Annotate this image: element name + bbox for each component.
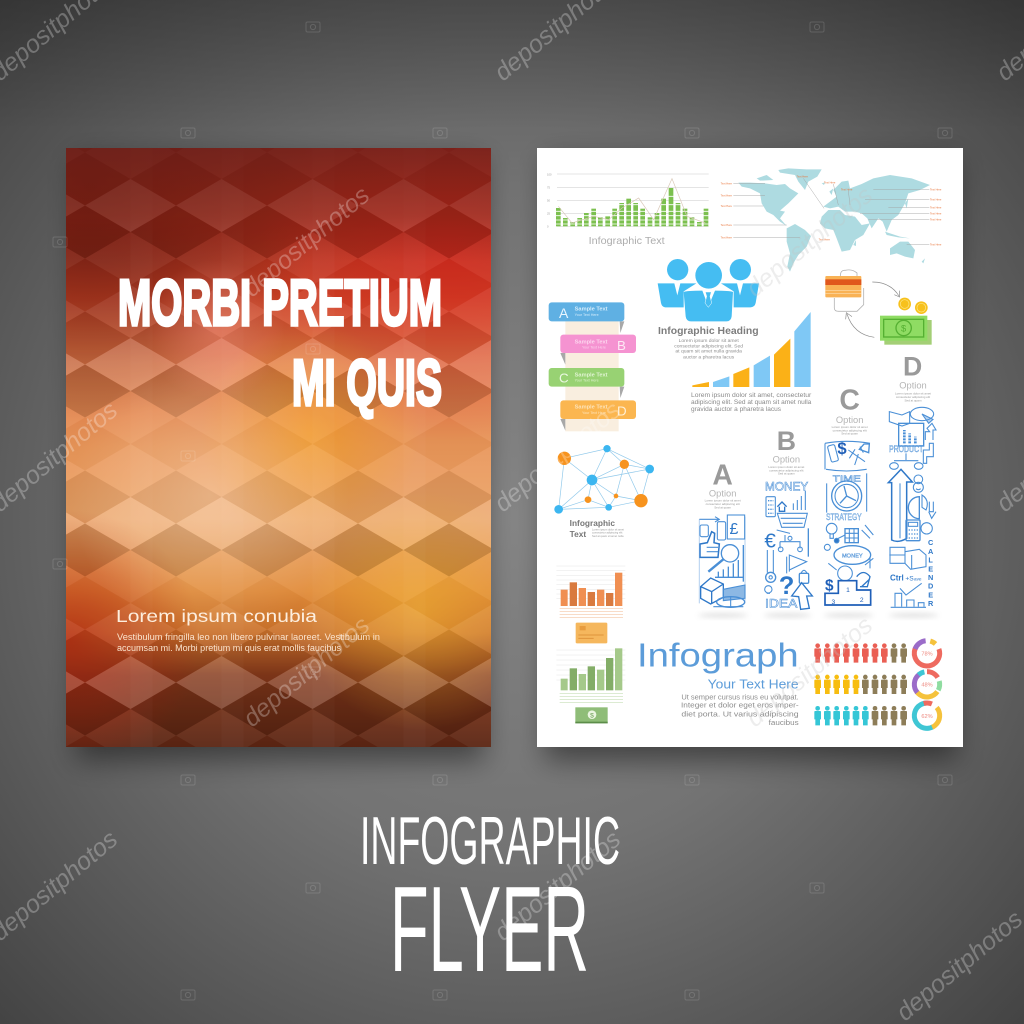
network caption — [570, 518, 624, 539]
world map: Text Here — [930, 217, 942, 221]
ribbon D — [560, 400, 636, 419]
icon: banknote — [575, 707, 608, 723]
pictogram row teal 62% — [814, 706, 907, 725]
watermarks: depositphotos — [238, 611, 375, 733]
doodle column D: +S — [905, 576, 914, 583]
watermarks: depositphotos — [489, 825, 626, 947]
ribbon list — [549, 302, 636, 431]
option B label: Lorem ipsum dolor sit amet — [768, 465, 804, 469]
panel: white infographic flyer — [537, 148, 963, 747]
infograph paragraph: faucibus — [769, 720, 799, 727]
world map: Text Here — [930, 205, 942, 209]
bottom title — [360, 803, 620, 997]
doodle column B: ? — [779, 572, 794, 600]
world map: Text Here — [819, 237, 831, 241]
icon: banknote: $ — [590, 712, 594, 719]
doodle column B: € — [764, 529, 776, 552]
option labels C D: Sed at quam — [905, 398, 922, 402]
doodle column D: A — [928, 547, 934, 556]
infograph paragraph: Ut semper cursus risus eu volutpat. — [681, 694, 799, 701]
watermarks: depositphotos — [238, 181, 375, 303]
watermarks: depositphotos — [489, 396, 626, 518]
cover body text — [117, 632, 380, 654]
heading paragraph — [674, 338, 743, 361]
doodle column D: Ctrl — [890, 574, 904, 583]
option A label: Option — [709, 489, 736, 499]
world map: Text Here — [930, 211, 942, 215]
ribbon C: C — [559, 371, 569, 386]
doodle column C: 2 — [860, 597, 864, 604]
ribbon B: B — [617, 338, 626, 353]
option B label: consectetur adipiscing elit — [769, 468, 804, 472]
world map: Text Here — [797, 175, 809, 179]
line and bar chart: 75 — [547, 186, 550, 190]
doodle column shadows — [698, 614, 939, 617]
heading paragraph: consectetur adipiscing elit. Sed — [674, 343, 743, 349]
chart caption: Infographic Text — [589, 236, 665, 247]
ribbon B: Sample Text — [575, 340, 608, 346]
cover body text: accumsan mi. Morbi pretium mi quis erat mollis faucibus — [117, 643, 341, 654]
option labels C D: Lorem ipsum dolor sit amet — [895, 392, 931, 396]
ribbon B — [560, 335, 636, 353]
donut 62%: 62% — [921, 714, 933, 720]
line and bar chart: 25 — [547, 212, 550, 216]
option labels C D: Lorem ipsum dolor sit amet — [832, 425, 868, 429]
ribbon D: Sample Text — [575, 405, 608, 411]
ribbon C: Your Text Here — [575, 378, 599, 382]
doodle column A: £ — [730, 521, 739, 538]
doodle column D: ave — [914, 577, 922, 582]
cover subtitle: Lorem ipsum conubia — [116, 606, 317, 626]
infograph paragraph: Integer et dolor eget eros imper- — [681, 703, 799, 710]
bottom title: INFOGRAPHIC — [360, 803, 620, 879]
cover title: MORBI PRETIUM — [118, 266, 442, 339]
option A label: consectetur adipiscing elit — [706, 502, 740, 506]
ribbon A: Sample Text — [575, 307, 608, 313]
ribbon A — [549, 302, 624, 321]
world map: Text Here — [930, 197, 942, 201]
doodle column D: L — [928, 556, 933, 565]
network caption: Lorem ipsum dolor sit amet — [592, 528, 624, 532]
growth chart paragraph: Lorem ipsum dolor sit amet, consectetur — [691, 393, 811, 399]
world map: Text Here — [824, 180, 836, 184]
doodle column C: $ — [825, 578, 834, 595]
network caption: Sed at quam sit amet nulla — [592, 534, 624, 538]
doodle column C: TIME — [833, 474, 862, 484]
doodle column B — [764, 480, 812, 611]
donut 78% — [911, 637, 943, 670]
growth chart paragraph — [691, 393, 812, 413]
growth chart paragraph: adipiscing elit. Sed at quam sit amet nulla — [691, 400, 812, 406]
option labels C D: Option — [899, 381, 927, 391]
ribbon C — [549, 368, 624, 387]
heading paragraph: at quam sit amet nulla gravida — [675, 349, 742, 355]
doodle column D: R — [928, 599, 934, 608]
growth chart paragraph: gravida auctor a pharetra lacus — [691, 407, 781, 413]
network caption: Infographic — [570, 518, 615, 528]
option A label: Sed at quam — [714, 505, 732, 509]
panel: red-orange cover flyer — [66, 148, 491, 747]
upper infographic group — [547, 172, 932, 436]
green bar chart — [556, 648, 625, 702]
doodle column A — [699, 515, 745, 607]
option B label: Option — [773, 455, 800, 465]
option A label: A — [712, 459, 733, 491]
orange bar chart — [556, 566, 625, 618]
world map: Text Here — [930, 242, 942, 246]
infograph paragraph: diet porta. Ut varius adipiscing — [681, 712, 799, 719]
doodle column B: IDEA — [765, 597, 798, 611]
doodle column C: 3 — [831, 599, 835, 606]
doodle column C: $ — [837, 439, 847, 458]
option B label: B — [777, 426, 796, 456]
flyer drop shadows — [76, 160, 957, 760]
doodle column D — [888, 407, 936, 608]
donut 62% — [909, 698, 945, 734]
watermarks on white panel: depositphotos — [741, 181, 878, 303]
ribbon D: D — [617, 403, 627, 418]
world map: Text Here — [841, 187, 853, 191]
doodle column D: E — [928, 590, 933, 599]
cover title: MI QUIS — [292, 346, 442, 419]
watermarks on white panel — [741, 181, 878, 733]
doodle column D: E — [928, 564, 933, 573]
option labels C D: D — [903, 351, 922, 381]
option A label — [705, 459, 741, 509]
icon: credit card — [576, 623, 607, 643]
pictogram row yellow 48% — [814, 675, 907, 694]
icon: card and money cycle — [825, 270, 932, 345]
world map: Text Here — [721, 223, 733, 227]
donut 48%: 48% — [921, 683, 933, 689]
world map: Text Here — [721, 194, 733, 198]
doodle column C: STRATEGY — [826, 512, 862, 522]
heading paragraph: auctor a pharetra lacus — [683, 355, 735, 361]
bottom title: FLYER — [390, 861, 589, 997]
option labels C D — [832, 351, 931, 436]
infograph paragraph — [681, 694, 799, 727]
heading paragraph: Lorem ipsum dolor sit amet — [679, 338, 739, 344]
option labels C D: C — [839, 385, 860, 417]
watermarks on white panel: depositphotos — [741, 611, 878, 733]
doodle column D: N — [928, 573, 933, 582]
ribbon C: Sample Text — [575, 372, 608, 378]
icon: business people — [658, 259, 759, 321]
cover body text: Vestibulum fringilla leo non libero pulvinar laoreet. Vestibulum in — [117, 632, 380, 643]
option labels C D: Sed at quam — [841, 432, 859, 436]
doodle column D: PRODUCT — [889, 444, 924, 454]
ribbon A: A — [559, 305, 569, 321]
growth bar chart — [692, 312, 811, 387]
doodle column B: MONEY — [765, 480, 808, 494]
line and bar chart: 50 — [547, 199, 550, 203]
heading: Infographic Heading — [658, 326, 759, 337]
world map: Text Here — [721, 235, 733, 239]
doodle column C — [824, 439, 873, 606]
ribbon B: Your Text Here — [582, 346, 606, 350]
option labels C D: consectetur adipiscing elit — [833, 428, 867, 432]
line and bar chart: 0 — [547, 224, 549, 228]
world map: Text Here — [721, 204, 733, 208]
network caption: consectetur adipiscing elit — [592, 531, 623, 535]
donut 78%: 78% — [921, 652, 933, 658]
world map: Text Here — [721, 181, 733, 185]
option B label — [768, 426, 804, 476]
lower infographic group — [554, 426, 945, 734]
option labels C D: consectetur adipiscing elit — [896, 395, 930, 399]
option B label: Sed at quam — [778, 472, 795, 476]
title: Infograph: Infograph — [637, 638, 799, 675]
line and bar chart: 100 — [547, 172, 552, 176]
doodle column D: C — [928, 538, 934, 547]
world map: Text Here — [930, 187, 942, 191]
doodle column C: MONEY — [842, 553, 863, 559]
option A label: Lorem ipsum dolor sit amet — [705, 499, 741, 503]
option labels C D: Option — [836, 415, 863, 425]
subtitle: Your Text Here: Your Text Here — [708, 677, 799, 691]
doodle column D: D — [928, 582, 933, 591]
world map — [721, 168, 942, 272]
doodle column C: 1 — [846, 587, 850, 594]
network diagram — [554, 445, 654, 514]
pictogram row red 78% — [814, 643, 907, 663]
network caption: Text — [570, 529, 586, 539]
line and bar chart — [547, 172, 709, 228]
cover title — [118, 266, 442, 419]
icon: card and money cycle: $ — [901, 323, 907, 333]
ribbon A: Your Text Here — [575, 313, 599, 317]
donut 48% — [909, 666, 945, 702]
ribbon D: Your Text Here — [582, 411, 606, 415]
